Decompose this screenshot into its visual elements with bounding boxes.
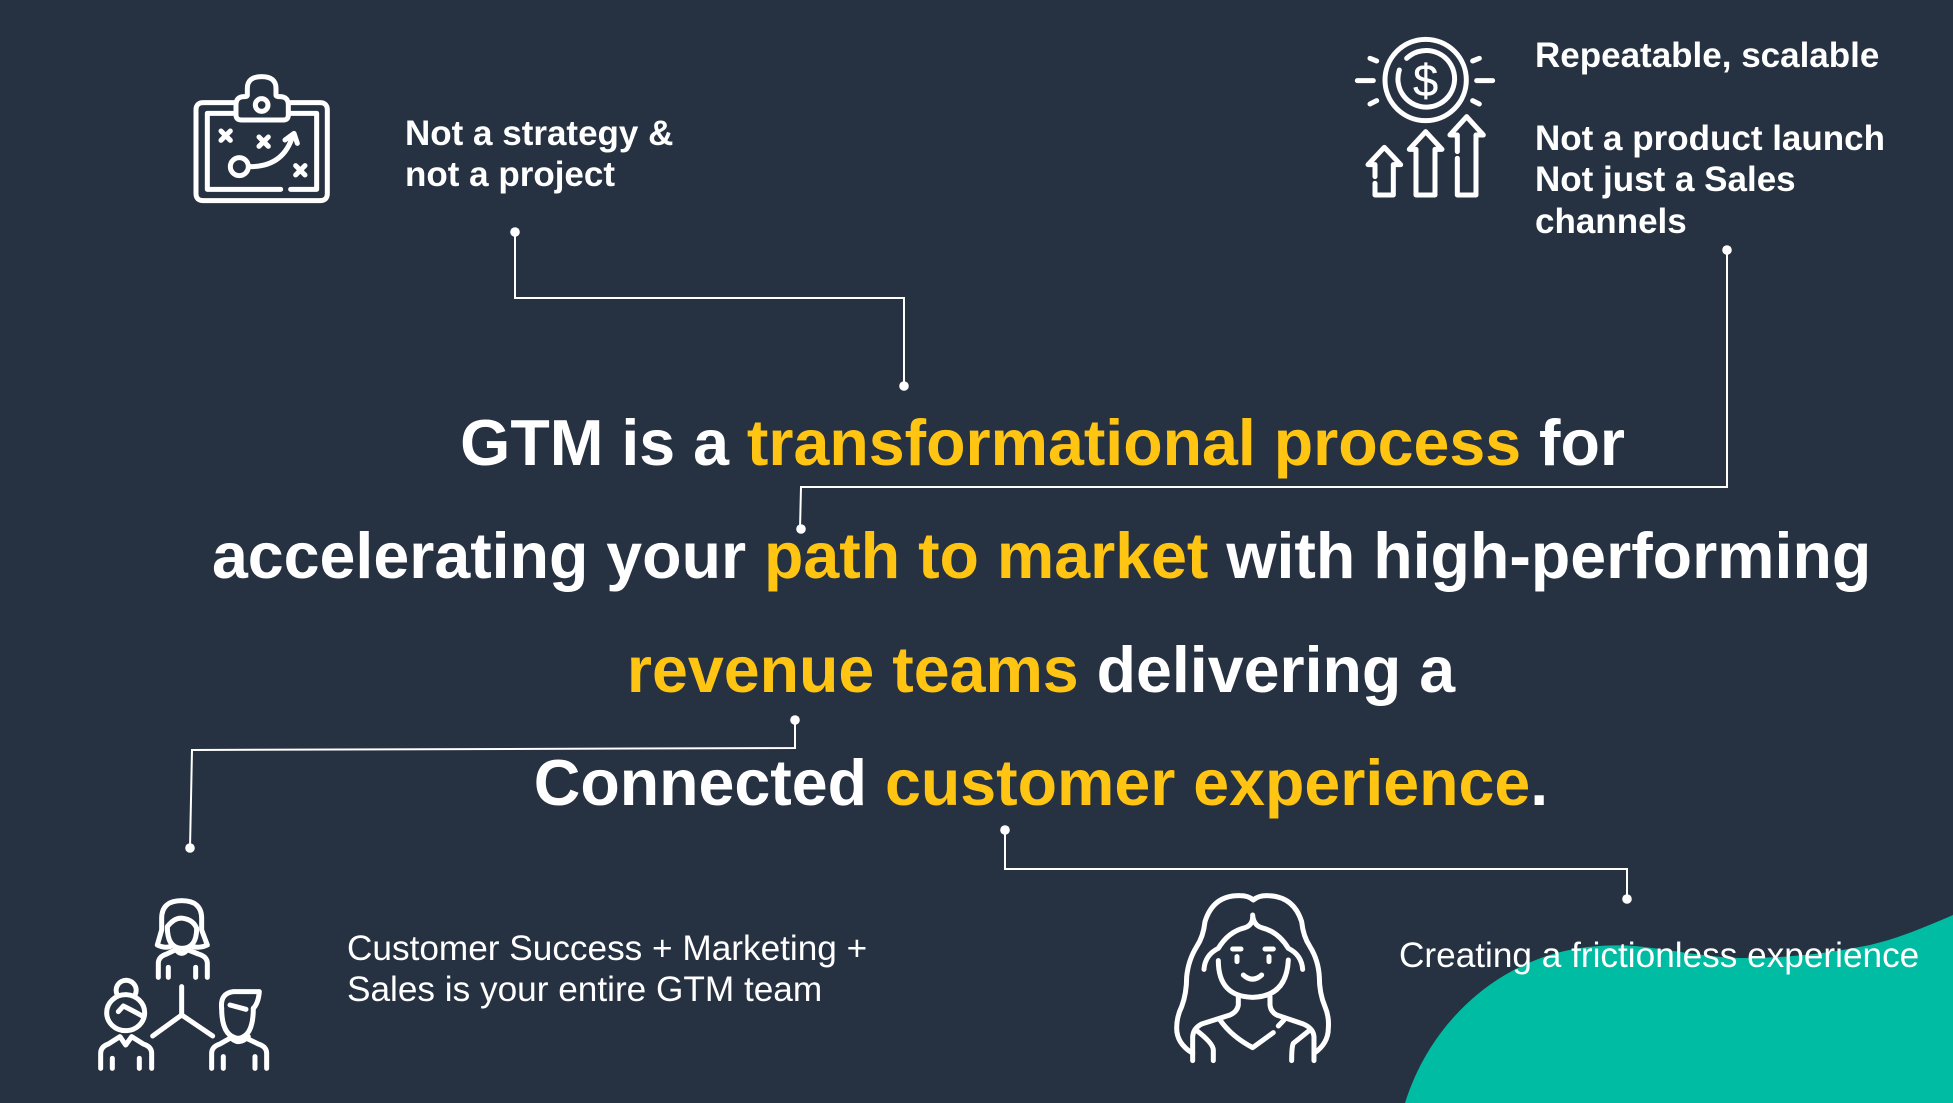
text: entire GTM team: Sales is your entire GTM team [347, 970, 822, 1009]
text: entire GTM team: Customer Success + Marketing + [347, 929, 867, 968]
headline: accelerating your path to market with high-performing [212, 520, 1871, 592]
text: repeatable scalable: Repeatable, scalable [1535, 36, 1879, 75]
icon: revenue team [101, 901, 267, 1068]
text: repeatable scalable: Not just a Sales [1535, 160, 1796, 199]
connector: repeatable to headline [796, 245, 1732, 534]
icon: customer [1177, 896, 1329, 1061]
headline: GTM is a transformational process for [460, 407, 1625, 479]
text: frictionless experience: Creating a frictionless experience [1399, 936, 1919, 975]
connector: strategy to headline [510, 227, 909, 391]
text: repeatable scalable: Not a product launch [1535, 119, 1885, 158]
text: repeatable scalable [1535, 36, 1885, 241]
text: repeatable scalable: channels [1535, 202, 1687, 241]
icon: revenue growth: $ [1413, 55, 1438, 106]
connector: headline to team [185, 715, 800, 853]
headline [212, 407, 1871, 819]
headline: revenue teams delivering a [627, 634, 1456, 706]
text: entire GTM team [347, 929, 867, 1009]
teal corner shape [1405, 915, 1953, 1103]
headline: Connected customer experience. [534, 747, 1548, 819]
text: not a strategy: not a project [405, 155, 615, 194]
icon: revenue growth [1357, 39, 1493, 195]
text: not a strategy [405, 114, 673, 194]
connector: headline to experience [1000, 825, 1632, 904]
text: not a strategy: Not a strategy & [405, 114, 673, 153]
icon: playbook clipboard [196, 77, 327, 201]
